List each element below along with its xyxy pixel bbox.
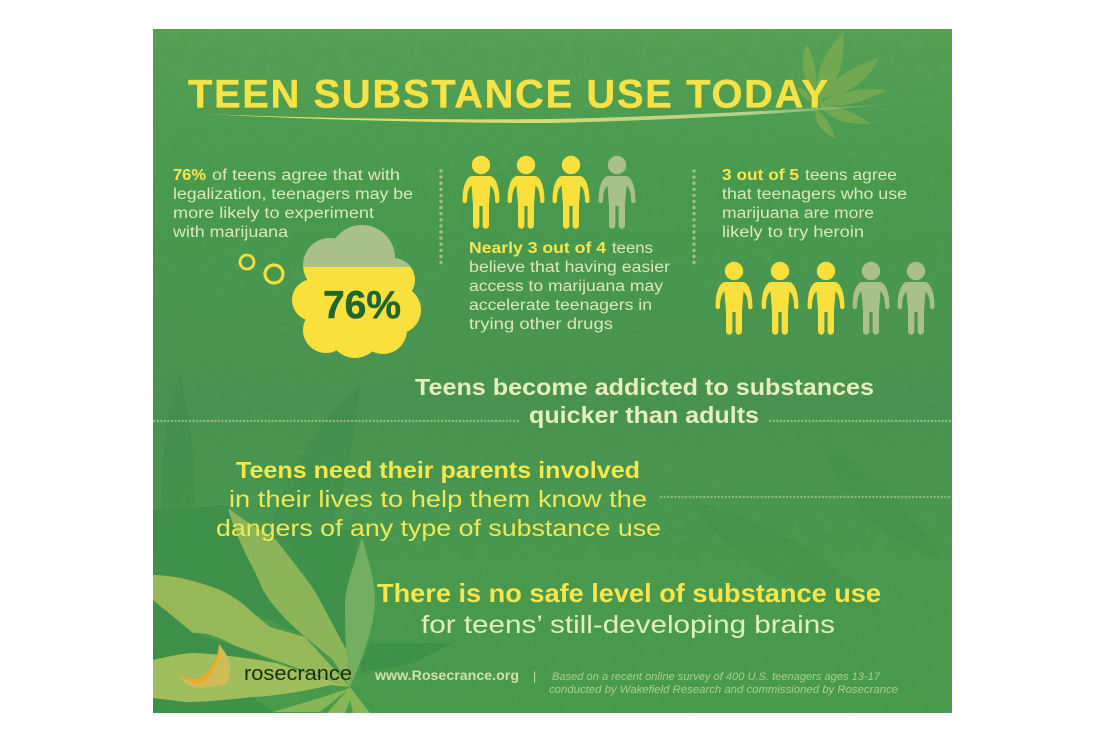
statement: parents involved: dangers of any type of substance use — [216, 515, 661, 541]
stat text: nearly 3 out of 4: accelerate teenagers in — [469, 297, 652, 314]
website: www.Rosecrance.org — [374, 668, 519, 683]
stat text: nearly 3 out of 4 — [469, 240, 670, 333]
infographic canvas — [152, 29, 952, 713]
source note — [549, 671, 898, 696]
cloud filled portion — [292, 267, 421, 358]
statement: addiction: quicker than adults — [529, 402, 759, 428]
logo wordmark: rosecrance — [244, 662, 352, 685]
stat text: 76% of teens: 76% — [173, 167, 206, 184]
green background panel — [153, 29, 952, 713]
statement: no safe level — [377, 578, 881, 639]
stat text: 76% of teens: of teens agree that with — [212, 167, 400, 184]
stat text: nearly 3 out of 4: teens — [612, 240, 653, 257]
statement: no safe level: There is no safe level of substance use — [377, 578, 881, 608]
statement: addiction — [415, 374, 874, 428]
stat text: 3 out of 5: teens agree — [805, 167, 897, 184]
stat text: nearly 3 out of 4: believe that having easier — [469, 259, 670, 276]
statement: no safe level: for teens’ still-developing brains — [421, 611, 835, 639]
pictogram: 3 of 4 teens — [463, 156, 636, 229]
stat text: 3 out of 5: likely to try heroin — [722, 224, 864, 241]
stat text: nearly 3 out of 4: Nearly 3 out of 4 — [469, 240, 606, 257]
title: TEEN SUBSTANCE USE TODAY — [188, 72, 828, 116]
stat text: 3 out of 5: 3 out of 5 — [722, 167, 799, 184]
stat text: 76% of teens: with marijuana — [172, 224, 288, 241]
statement: parents involved — [216, 457, 661, 541]
stat text: 76% of teens — [172, 167, 413, 241]
large leaf bottom left — [153, 508, 375, 713]
statement: parents involved: in their lives to help them know the — [229, 486, 647, 512]
stat text: nearly 3 out of 4: trying other drugs — [469, 316, 613, 333]
dark background leaf shapes — [153, 505, 452, 713]
footer separator: | — [533, 669, 536, 683]
stat text: 76% of teens: legalization, teenagers may be — [173, 186, 413, 203]
thought cloud 76% — [240, 225, 421, 358]
cloud unfilled portion — [303, 225, 411, 267]
statement: addiction: Teens become addicted to substances — [415, 374, 874, 400]
thought bubbles — [240, 255, 283, 283]
column dividers — [441, 171, 694, 264]
statement: parents involved: Teens need their parents involved — [236, 457, 640, 483]
stat text: 76% of teens: more likely to experiment — [173, 205, 375, 222]
stat text: 3 out of 5 — [722, 167, 907, 241]
pictogram: 3 of 5 teens — [716, 262, 934, 335]
stat text: 3 out of 5: marijuana are more — [722, 205, 874, 222]
stat text: nearly 3 out of 4: access to marijuana may — [469, 278, 663, 295]
leaf top right — [797, 32, 887, 139]
stat text: 3 out of 5: that teenagers who use — [722, 186, 907, 203]
horizontal dotted dividers — [154, 421, 952, 497]
source note: Based on a recent online survey of 400 U.S. teenagers ages 13-17 — [552, 671, 881, 683]
title swoosh underline — [205, 104, 893, 123]
source note: conducted by Wakefield Research and commissioned by Rosecrance — [549, 684, 898, 696]
logo: rosecrance wing — [178, 644, 230, 688]
cloud number: 76% — [323, 284, 401, 327]
